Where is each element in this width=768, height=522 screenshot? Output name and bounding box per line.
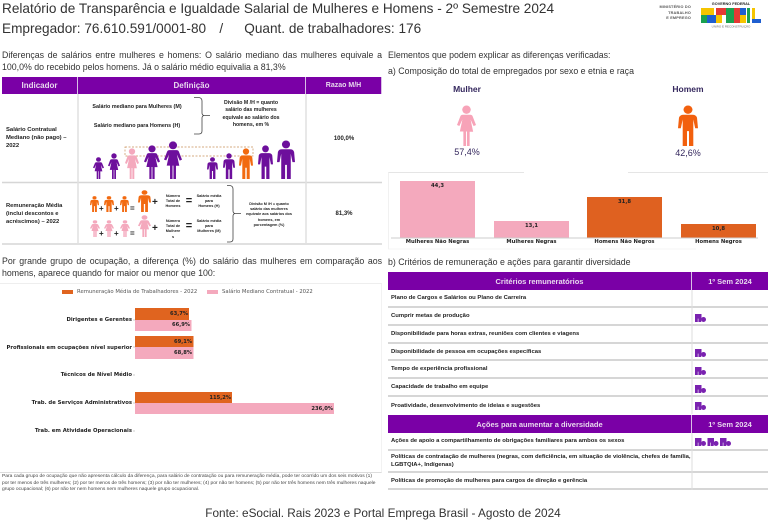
criteria row [388,326,768,344]
equals sign men: = [186,195,192,207]
bracket 2 [227,185,241,242]
chart: occupation groups [0,283,382,473]
row lines [2,94,382,245]
definition 2: division text: salário das mulheres [250,207,288,211]
table: actions header: Ações para aumentar a diversidade [476,420,603,428]
percent women: 57,4% [454,147,480,157]
row 2 label: Remuneração Média [6,203,62,209]
row 2 label [6,203,62,225]
number of women: Mulhere [166,229,180,233]
number of men: Total de [166,199,180,203]
legend [62,288,313,295]
category: administrativos: Trab. de Serviços Administrativos [32,400,132,406]
legend label orange: Remuneração Média de Trabalhadores - 2022 [77,289,197,295]
definition 1: division text: Divisão M /H = quanto [224,100,278,106]
definition 1: median text: Salário mediano para Mulheres (M) [92,104,182,110]
category: dirigentes: Dirigentes e Gerentes [66,317,132,323]
people: average salary illustration: = [130,229,135,238]
average salary women: Salário média [197,219,221,223]
logo: ministério: MINISTÉRIO DO [660,5,691,9]
criteria row: Capacidade de trabalho em equipe [391,384,488,390]
people: average salary illustration: + [152,223,158,234]
icon: woman [457,106,476,146]
label: mulher: Mulher [453,84,481,94]
logo: governo federal brasil: GOVERNO FEDERAL [712,2,751,6]
definition 2: division text: equivale aos salários dos [246,212,292,216]
people: average salary illustration: + [152,197,158,208]
people: average salary illustration: + [99,229,104,238]
logo: ministério [660,4,691,20]
header: definição: Definição [173,81,210,90]
row 1 label: 2022 [6,143,19,149]
actions row: Ações de apoio a compartilhamento de obrigações familiares para ambos os sexos [391,438,624,444]
table: actions header period: 1º Sem 2024 [708,420,752,428]
table: actions header period [692,415,768,433]
value 13,1: 13,1 [525,223,538,229]
percent men: 42,6% [675,148,701,158]
people: average salary illustration: + [114,229,119,238]
average salary men: Salário média [197,194,221,198]
definition 1: division text: equivale ao salário dos [222,115,280,121]
category: profissionais: Profissionais em ocupações nível superior [6,345,132,351]
average salary women [196,219,222,233]
value 68,8: 68,8% [174,350,192,356]
label: homem: Homem [672,84,704,94]
footnote: Para cada grupo de ocupação que não apresenta cálculo da diferença, para salário de contratação ou para remuneração média, pode ter ocorrido um dos seis motivos (1) por ter menos de três mulheres; (2) por ter menos de três homens; (3) por não ter mulheres; (4) por não ter homens; (5) por não ter três homens nem três mulheres naquele grupo ocupacional; (6) por não ter nem homens nem mulheres naquele grupo ocupacional. [2,474,376,492]
chart: composition [388,172,768,250]
actions row: Políticas de contratação de mulheres (negras, com deficiência, em situação de violência, chefes de família, LGBTQIA+, Indígenas) [391,454,691,468]
column divider [692,290,693,488]
number of women [166,219,180,239]
bracket 1 [194,97,210,134]
average salary women: para [205,224,213,228]
number of women: s [172,235,174,239]
row 1 label: Mediano (não pago) – [6,135,67,141]
row 2 label: (inclui descontos e [6,211,59,217]
intro text: salary differences: Diferenças de salários entre mulheres e homens: O salário mediano das mulheres equivale a 100,0% do recebido pelos homens. Já o salário médio equivalia a 81,3% [2,50,382,72]
table: criteria header: Critérios remuneratórios [496,276,583,286]
header: razão [306,77,382,94]
number of women: Total de [166,224,180,228]
definition 2: division text: porcentagem (%) [254,223,284,227]
people: median salary illustration [93,140,295,179]
source: Fonte: eSocial. Rais 2023 e Portal Emprega Brasil - Agosto de 2024 [205,506,561,520]
category: homens negros: Homens Negros [695,239,742,245]
criteria row: Disponibilidade de pessoa em ocupações específicas [391,348,541,354]
value 69,1: 69,1% [174,339,192,345]
value 236,0: 236,0% [311,406,333,412]
icon: man [678,106,698,146]
definition 1: division text [222,100,280,128]
value 10,8: 10,8 [712,226,725,232]
title: Relatório de Transparência e Igualdade Salarial de Mulheres e Homens - 2º Semestre 2024 [2,1,554,16]
row 1 label: Salário Contratual [6,127,57,133]
heading: elements: Elementos que podem explicar as diferenças verificadas: [388,50,610,60]
average salary women: Mulheres (M) [197,229,221,233]
category: homens não negros: Homens Não Negros [594,239,655,245]
header: definição [78,77,306,94]
actions row [388,451,768,473]
header: indicador [2,77,78,94]
average salary men: para [205,199,213,203]
table: indicators [2,77,382,245]
value 115,2: 115,2% [209,395,231,401]
value 66,9: 66,9% [172,322,190,328]
legend swatch pink [207,290,218,294]
header: indicador: Indicador [21,81,58,90]
criteria row [388,308,768,326]
definition 2: division text [246,202,292,227]
row 2 value: 81,3% [335,211,352,217]
table: criteria header [388,272,692,290]
actions row [388,433,768,451]
definition 1: division text: homens, em % [233,122,269,128]
criteria row: Proatividade, desenvolvimento de ideias e sugestões [391,402,540,408]
row 1 label [6,127,67,149]
criteria row [388,290,768,308]
criteria row: Plano de Cargos e Salários ou Plano de Carreira [391,295,526,301]
people: average salary illustration: + [114,204,119,213]
people: average salary illustration [90,190,158,238]
people: average salary illustration: = [130,204,135,213]
legend label pink: Salário Mediano Contratual - 2022 [222,289,313,295]
header: razão: Razao M/H [326,82,361,89]
number of men: Homens [166,204,180,208]
actions row [388,473,768,490]
legend swatch orange [62,290,73,294]
number of men [166,194,180,208]
average salary men: Homens (H) [198,204,220,208]
logo: ministério: E EMPREGO [666,16,691,20]
criteria row [388,361,768,379]
heading a: a) Composição do total de empregados por sexo e etnia e raça [388,66,634,76]
number of women: Número [166,219,180,223]
average salary men [196,194,222,208]
row 1 value: 100,0% [334,136,354,142]
criteria row [388,344,768,361]
category: mulheres negras: Mulheres Negras [506,239,557,245]
category: operacionais: Trab. em Atividade Operacionais [35,428,132,434]
definition 1: median men text: Salário mediano para Homens (H) [94,123,180,129]
definition 1: division text: salário das mulheres [225,107,277,113]
category: técnicos: Técnicos de Nível Médio [61,372,132,378]
definition 2: division text: homens, em [258,218,280,222]
heading: occupation groups: Por grande grupo de ocupação, a diferença (%) do salário das mulheres em comparação aos homens, aparece quando for maior ou menor que 100: [2,256,382,278]
criteria row: Cumprir metas de produção [391,313,470,319]
criteria row: Tempo de experiência profissional [391,366,487,372]
equals sign women: = [186,220,192,232]
criteria row: Disponibilidade para horas extras, reuniões com clientes e viagens [391,331,579,337]
employer line: Empregador: 76.610.591/0001-80 / Quant. de trabalhadores: 176 [2,21,421,36]
logo: ministério: TRABALHO [668,10,691,14]
category: mulheres não negras: Mulheres Não Negras [406,239,469,245]
value 63,7: 63,7% [170,311,188,317]
table: criteria header period [692,272,768,290]
heading b: b) Critérios de remuneração e ações para garantir diversidade [388,257,631,267]
value 31,8: 31,8 [618,199,631,205]
table: actions header [388,415,692,433]
logo: governo federal brasil: UNIÃO E RECONSTRUÇÃO [712,24,751,28]
criteria row [388,379,768,397]
definition 2: division text: Divisão M /H = quanto [249,202,289,206]
people: average salary illustration: + [99,204,104,213]
number of men: Número [166,194,180,198]
bars [133,308,334,432]
icons: yes markers [695,314,731,446]
value 44,3: 44,3 [431,183,444,189]
table: criteria header period: 1º Sem 2024 [708,276,752,286]
logo: governo federal brasil [701,2,761,28]
actions row: Políticas de promoção de mulheres para cargos de direção e gerência [391,478,587,484]
row 2 label: acréscimos) – 2022 [6,219,59,225]
